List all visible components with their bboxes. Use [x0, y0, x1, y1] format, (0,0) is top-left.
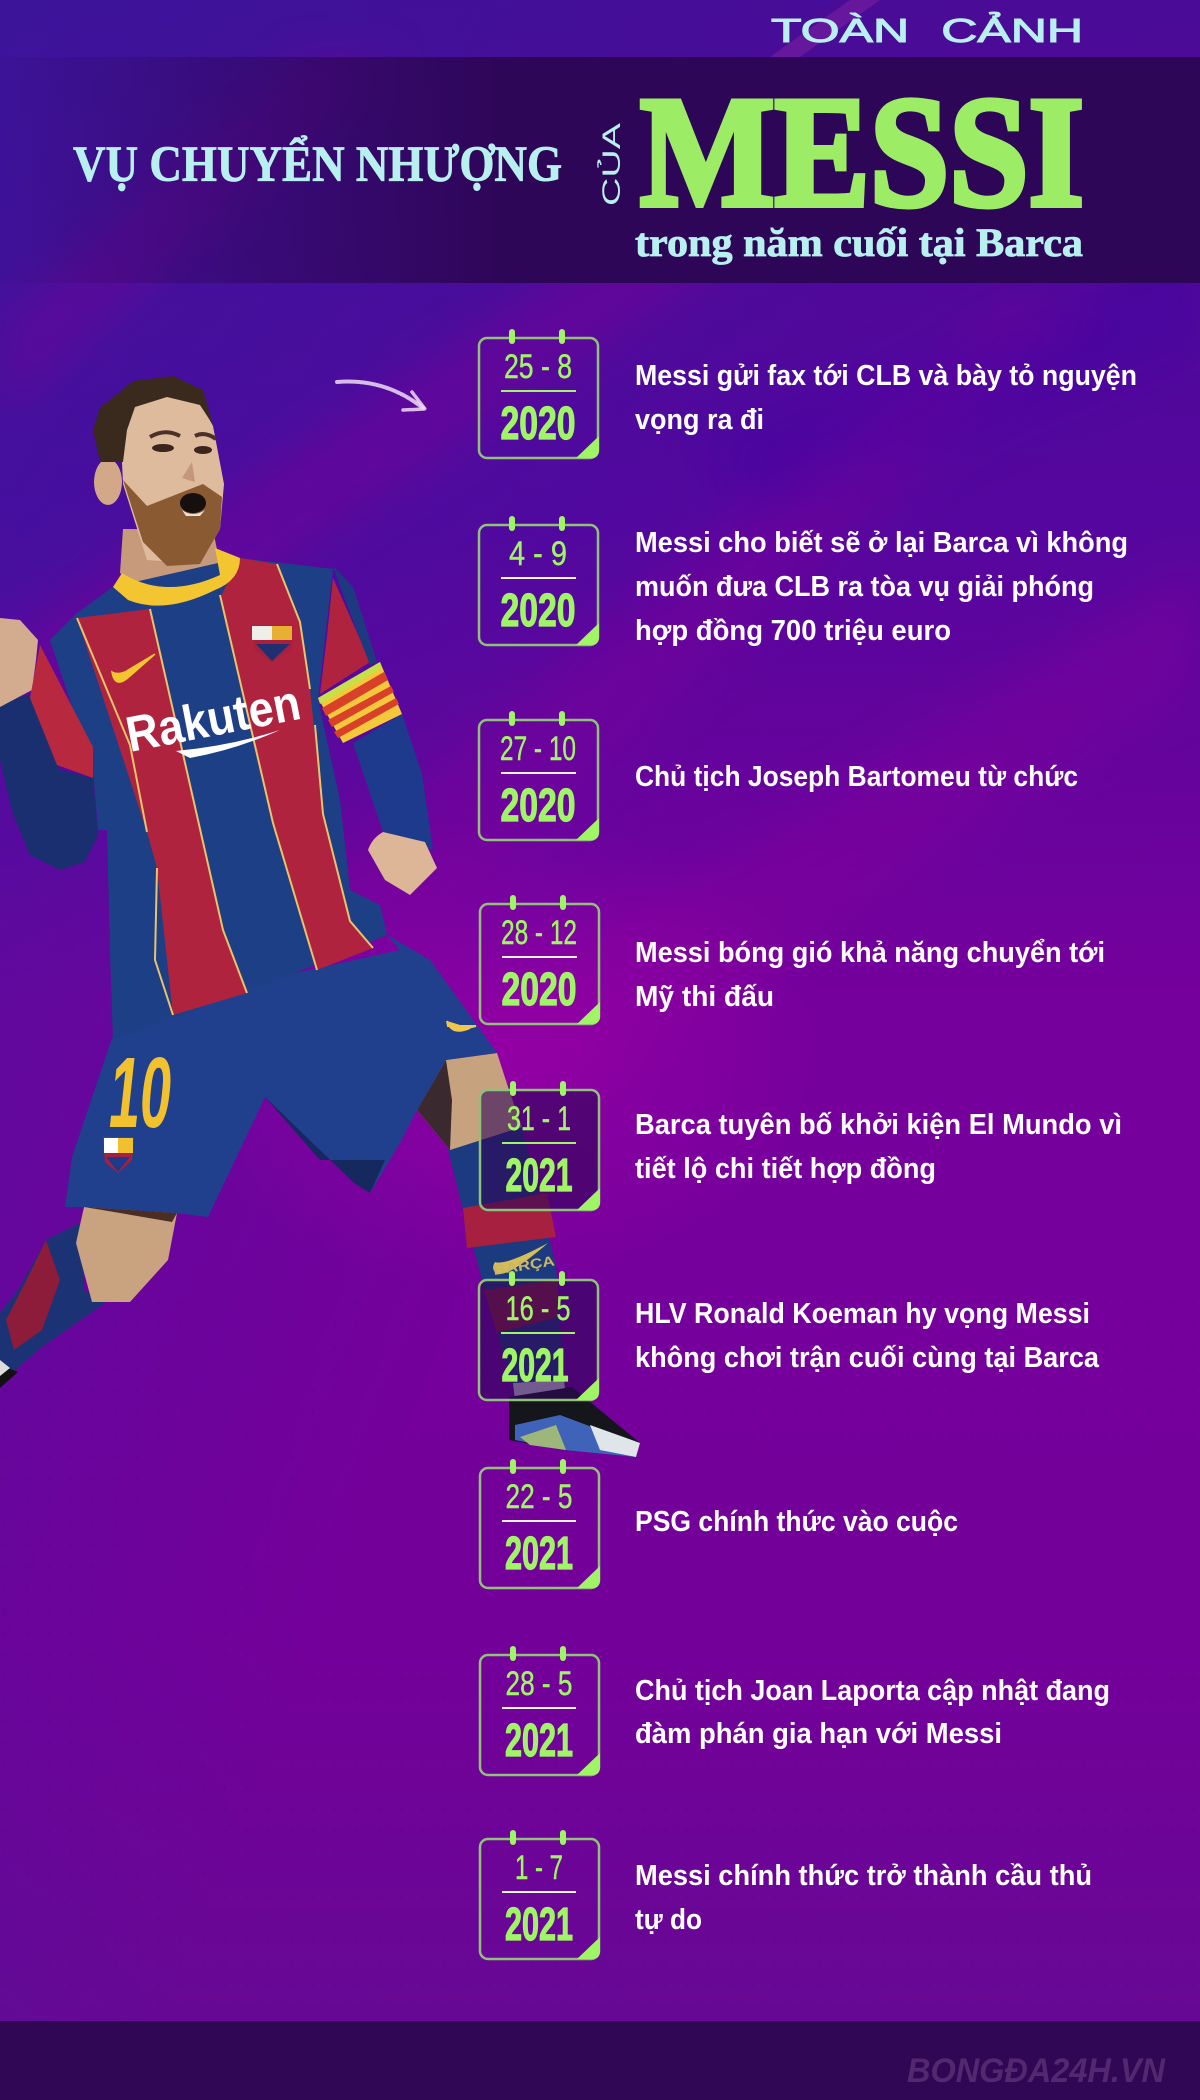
shorts swoosh [447, 1021, 476, 1031]
calendar: 25-8 2020: 25 - 8 [504, 348, 572, 386]
timeline item 8 [480, 1646, 1110, 1775]
calendar: 27-10 2020: 2020 [500, 779, 576, 831]
text: tự do [635, 1904, 702, 1936]
shorts crest [103, 1137, 134, 1173]
left leg [0, 1207, 177, 1388]
title: TOÀN CẢNH: TOÀN CẢNH [771, 12, 1083, 49]
collar [113, 548, 240, 606]
calendar: 1-7 2021: 2021 [505, 1898, 573, 1950]
calendar: 16-5 2021: 16 - 5 [506, 1290, 570, 1328]
text: vọng ra đi [635, 404, 764, 436]
icon: sock swoosh [493, 1243, 548, 1274]
calendar: 1-7 2021: 1 - 7 [515, 1849, 563, 1887]
text: PSG chính thức vào cuộc [635, 1506, 958, 1538]
calendar: 27-10 2020 [479, 711, 599, 840]
calendar: 22-5 2021: 22 - 5 [506, 1478, 572, 1516]
text: muốn đưa CLB ra tòa vụ giải phóng [635, 571, 1094, 603]
timeline item 3 [479, 711, 1078, 840]
sock text: BARÇA [492, 1252, 556, 1278]
calendar: 31-1 2021: 2021 [506, 1149, 572, 1201]
text: Messi gửi fax tới CLB và bày tỏ nguyện [635, 360, 1137, 392]
neck [120, 529, 220, 600]
calendar: 16-5 2021 [479, 1271, 599, 1400]
footer band [0, 2021, 1200, 2100]
shorts [65, 935, 497, 1217]
calendar: 4-9 2020 [479, 516, 599, 645]
calendar: 28-12 2020: 28 - 12 [501, 914, 577, 952]
calendar: 28-5 2021 [480, 1646, 600, 1775]
timeline item 4 [480, 895, 1105, 1024]
text: Messi cho biết sẽ ở lại Barca vì không [635, 527, 1128, 559]
text: Chủ tịch Joan Laporta cập nhật đang [635, 1675, 1110, 1707]
calendar: 16-5 2021: 2021 [502, 1339, 568, 1391]
calendar: 25-8 2020: 2020 [500, 397, 576, 449]
timeline item 5 [480, 1081, 1122, 1210]
calendar: 4-9 2020: 2020 [500, 584, 576, 636]
text: HLV Ronald Koeman hy vọng Messi [635, 1298, 1090, 1330]
captain armband [318, 662, 402, 743]
timeline item 9 [480, 1830, 1092, 1959]
left arm and fist [0, 618, 98, 870]
right leg [417, 1053, 640, 1457]
calendar: 25-8 2020 [479, 329, 599, 458]
timeline item 1 [479, 329, 1137, 458]
right forearm and hand [353, 714, 437, 895]
calendar: 28-5 2021: 28 - 5 [506, 1665, 572, 1703]
sponsor text: Rakuten [121, 674, 305, 763]
calendar: 28-12 2020: 2020 [502, 963, 576, 1015]
calendar: 22-5 2021: 2021 [505, 1527, 573, 1579]
footer logo: BONGĐA24H.VN [907, 2052, 1166, 2090]
title: CỦA vertical: CỦA [596, 123, 626, 206]
calendar: 28-12 2020 [480, 895, 600, 1024]
calendar: 27-10 2020: 27 - 10 [500, 730, 576, 768]
text: Messi bóng gió khả năng chuyển tới [635, 937, 1105, 969]
timeline item 6 [479, 1271, 1100, 1400]
shirt [30, 548, 402, 1040]
text: Mỹ thi đấu [635, 981, 774, 1013]
boot [509, 1387, 640, 1457]
timeline item 2 [479, 516, 1128, 647]
calendar: 31-1 2021 [480, 1081, 600, 1210]
title: MESSI: MESSI [640, 65, 1084, 240]
shirt swoosh [112, 654, 155, 682]
calendar: 1-7 2021 [480, 1830, 600, 1959]
calendar: 4-9 2020: 4 - 9 [509, 535, 567, 573]
player photo illustration [0, 376, 640, 1457]
calendar: 31-1 2021: 31 - 1 [507, 1100, 571, 1138]
header band [0, 57, 1200, 283]
crest [250, 625, 293, 662]
shorts number: 10 [109, 1037, 171, 1149]
text: Chủ tịch Joseph Bartomeu từ chức [635, 761, 1078, 793]
sponsor swoosh [176, 730, 280, 758]
icon: chalk arrow [337, 382, 425, 410]
title: VỤ CHUYỂN NHƯỢNG: VỤ CHUYỂN NHƯỢNG [73, 135, 562, 193]
text: hợp đồng 700 triệu euro [635, 615, 951, 647]
timeline item 7 [480, 1459, 958, 1588]
calendar: 22-5 2021 [480, 1459, 600, 1588]
text: không chơi trận cuối cùng tại Barca [635, 1342, 1100, 1374]
text: đàm phán gia hạn với Messi [635, 1718, 1002, 1750]
subtitle: trong năm cuối tại Barca [635, 220, 1083, 265]
text: tiết lộ chi tiết hợp đồng [635, 1153, 936, 1185]
calendar: 28-5 2021: 2021 [505, 1714, 573, 1766]
text: Barca tuyên bố khởi kiện El Mundo vì [635, 1109, 1122, 1141]
head [93, 376, 224, 566]
text: Messi chính thức trở thành cầu thủ [635, 1860, 1092, 1892]
